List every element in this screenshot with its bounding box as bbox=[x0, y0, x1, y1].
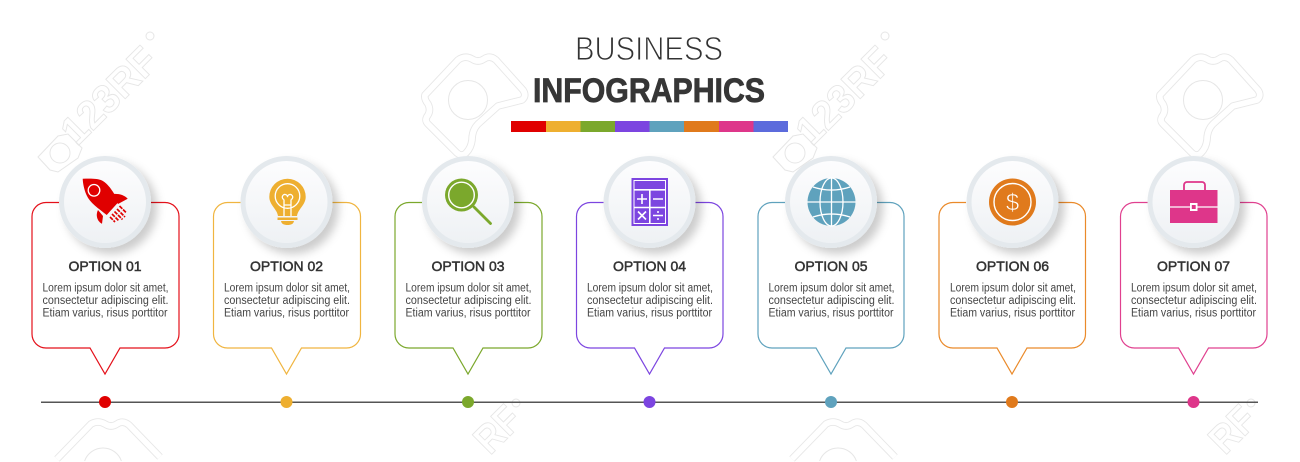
body text bbox=[42, 282, 168, 320]
body text: Lorem ipsum dolor sit amet, bbox=[1131, 282, 1257, 294]
timeline dot 5 bbox=[825, 396, 837, 408]
body text: Lorem ipsum dolor sit amet, bbox=[406, 282, 532, 294]
panel: option 01 bbox=[32, 156, 179, 374]
body text: Etiam varius, risus porttitor bbox=[1131, 308, 1256, 320]
body text bbox=[1131, 282, 1257, 320]
heading: OPTION 05 bbox=[794, 258, 868, 274]
panel: option 07 bbox=[1120, 156, 1267, 374]
timeline dot 1 bbox=[99, 396, 111, 408]
timeline dot 3 bbox=[462, 396, 474, 408]
callout frame bbox=[576, 202, 723, 374]
heading: OPTION 01 bbox=[68, 258, 142, 274]
callout frame bbox=[214, 202, 360, 374]
watermark: stock logo pattern: RF bbox=[1200, 397, 1265, 462]
timeline dot 6 bbox=[1006, 396, 1018, 408]
timeline dot 4 bbox=[644, 396, 656, 408]
body text: consectetur adipiscing elit. bbox=[42, 295, 168, 307]
body text: Lorem ipsum dolor sit amet, bbox=[224, 282, 350, 294]
body text: consectetur adipiscing elit. bbox=[1131, 295, 1257, 307]
heading: OPTION 04 bbox=[613, 258, 686, 274]
callout frame bbox=[1120, 202, 1267, 374]
body text: Etiam varius, risus porttitor bbox=[224, 308, 349, 320]
callout frame bbox=[939, 202, 1086, 374]
body text: Etiam varius, risus porttitor bbox=[768, 308, 894, 320]
panel: option 04 bbox=[576, 156, 723, 374]
panel: option 03 bbox=[395, 156, 542, 374]
title line: business: BUSINESS bbox=[575, 30, 723, 67]
body text: Etiam varius, risus porttitor bbox=[587, 308, 712, 320]
body text: Lorem ipsum dolor sit amet, bbox=[42, 282, 168, 294]
heading: OPTION 03 bbox=[432, 258, 505, 274]
body text: consectetur adipiscing elit. bbox=[768, 295, 894, 307]
icon disc bbox=[966, 156, 1058, 248]
title bbox=[533, 30, 765, 110]
body text bbox=[406, 282, 532, 320]
body text: Lorem ipsum dolor sit amet, bbox=[768, 282, 894, 294]
body text: consectetur adipiscing elit. bbox=[224, 295, 350, 307]
icon: dollar coin: $ bbox=[1006, 190, 1019, 216]
panel: option 05 bbox=[758, 156, 904, 374]
icon disc bbox=[604, 156, 696, 248]
title line: infographics: INFOGRAPHICS bbox=[533, 72, 765, 110]
body text bbox=[224, 282, 350, 320]
body text bbox=[768, 282, 894, 320]
icon disc bbox=[422, 156, 514, 248]
timeline axis bbox=[41, 401, 1258, 403]
heading: OPTION 06 bbox=[976, 258, 1049, 274]
icon: calculator bbox=[632, 178, 668, 226]
colour strip bbox=[511, 121, 788, 132]
body text: Lorem ipsum dolor sit amet, bbox=[950, 282, 1076, 294]
panel: option 02 bbox=[214, 156, 360, 374]
icon disc bbox=[59, 156, 151, 248]
watermark: stock logo pattern: RF bbox=[465, 397, 530, 462]
timeline dot 2 bbox=[280, 396, 292, 408]
callout frame bbox=[395, 202, 542, 374]
icon: briefcase bbox=[1170, 182, 1218, 223]
heading: OPTION 02 bbox=[250, 258, 323, 274]
body text bbox=[950, 282, 1076, 320]
body text: consectetur adipiscing elit. bbox=[950, 295, 1076, 307]
icon: globe bbox=[808, 178, 856, 226]
body text: consectetur adipiscing elit. bbox=[587, 295, 713, 307]
icon disc bbox=[785, 156, 877, 248]
icon: light bulb bbox=[269, 179, 306, 225]
body text: Etiam varius, risus porttitor bbox=[950, 308, 1075, 320]
callout frame bbox=[758, 202, 904, 374]
icon disc bbox=[1148, 156, 1240, 248]
heading: OPTION 07 bbox=[1157, 258, 1230, 274]
icon disc bbox=[240, 156, 332, 248]
watermark: stock logo pattern: 123RF bbox=[787, 39, 902, 153]
body text: consectetur adipiscing elit. bbox=[406, 295, 532, 307]
callout frame bbox=[32, 202, 179, 374]
body text bbox=[587, 282, 713, 320]
body text: Etiam varius, risus porttitor bbox=[406, 308, 531, 320]
body text: Lorem ipsum dolor sit amet, bbox=[587, 282, 713, 294]
icon: magnifier bbox=[445, 178, 490, 224]
panel: option 06 bbox=[939, 156, 1086, 374]
body text: Etiam varius, risus porttitor bbox=[42, 308, 168, 320]
icon: rocket bbox=[83, 179, 128, 224]
icon: dollar coin bbox=[989, 178, 1036, 226]
watermark: stock logo pattern: 123RF bbox=[52, 39, 167, 153]
timeline dot 7 bbox=[1188, 396, 1200, 408]
timeline bbox=[41, 396, 1258, 408]
